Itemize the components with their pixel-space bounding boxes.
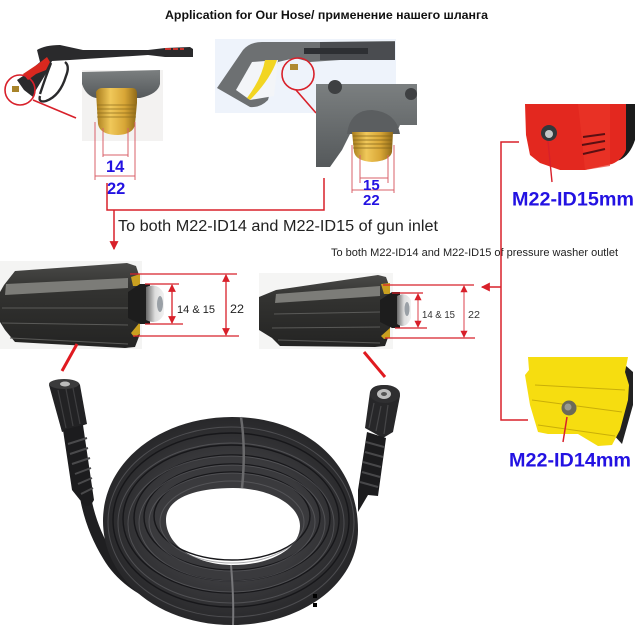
dimension: 15 and 22 on second gun inlet [352, 145, 394, 209]
left hose end fitting [49, 379, 94, 506]
text: pressure washer outlet note: To both M22-ID14 and M22-ID15 of pressure washer outlet [331, 247, 618, 259]
dimension: 14 and 22 on first gun inlet: 14 [106, 158, 125, 176]
hose coil with both ends [49, 379, 400, 625]
coil [103, 417, 358, 625]
arrow: connector from gun inlets to left fitting [107, 178, 324, 249]
dimension: 14 and 15, 22 on left fitting [130, 274, 244, 336]
dimension: 14 and 15, 22 on right fitting: 22 [468, 309, 480, 321]
icon: yellow pressure washer outlet [525, 357, 633, 446]
left hose tail [86, 500, 190, 606]
pointer: right fitting to hose end [364, 352, 385, 377]
panel: right hose fitting [259, 273, 411, 349]
dimension: 14 and 15, 22 on left fitting: 14 & 15 [177, 304, 215, 316]
panel: first gun inlet closeup [82, 70, 163, 141]
pointer: left fitting to hose end [62, 344, 77, 371]
panel: left hose fitting [0, 261, 164, 349]
dimension: 14 and 15, 22 on left fitting: 22 [230, 302, 244, 316]
arrow: bracket from pressure washers to right fitting [482, 142, 528, 420]
right hose end fitting [358, 385, 400, 512]
panel: second gun inlet closeup [316, 80, 417, 167]
label: M22-ID14mm: M22-ID14mm [509, 450, 631, 472]
icon: red and black spray gun [12, 45, 193, 101]
label: M22-ID15mm: M22-ID15mm [512, 190, 634, 210]
dimension: 14 and 15, 22 on right fitting [383, 285, 480, 338]
text: gun inlet note: To both M22-ID14 and M22-ID15 of gun inlet [118, 218, 439, 235]
dimension: 14 and 22 on first gun inlet: 22 [107, 180, 125, 198]
icon: grey and yellow spray gun [215, 39, 396, 113]
dimension: 15 and 22 on second gun inlet: 15 [363, 177, 380, 194]
dimension: 15 and 22 on second gun inlet: 22 [363, 192, 380, 209]
dimension: 14 and 22 on first gun inlet [95, 122, 135, 198]
icon: circle and pointer on first gun inlet [5, 75, 76, 118]
icon: red pressure washer outlet [525, 104, 635, 182]
icon: circle and pointer on second gun inlet [282, 58, 316, 113]
dimension: 14 and 15, 22 on right fitting: 14 & 15 [422, 310, 455, 321]
title: Application for Our Hose/ применение нашего шланга [165, 9, 489, 22]
